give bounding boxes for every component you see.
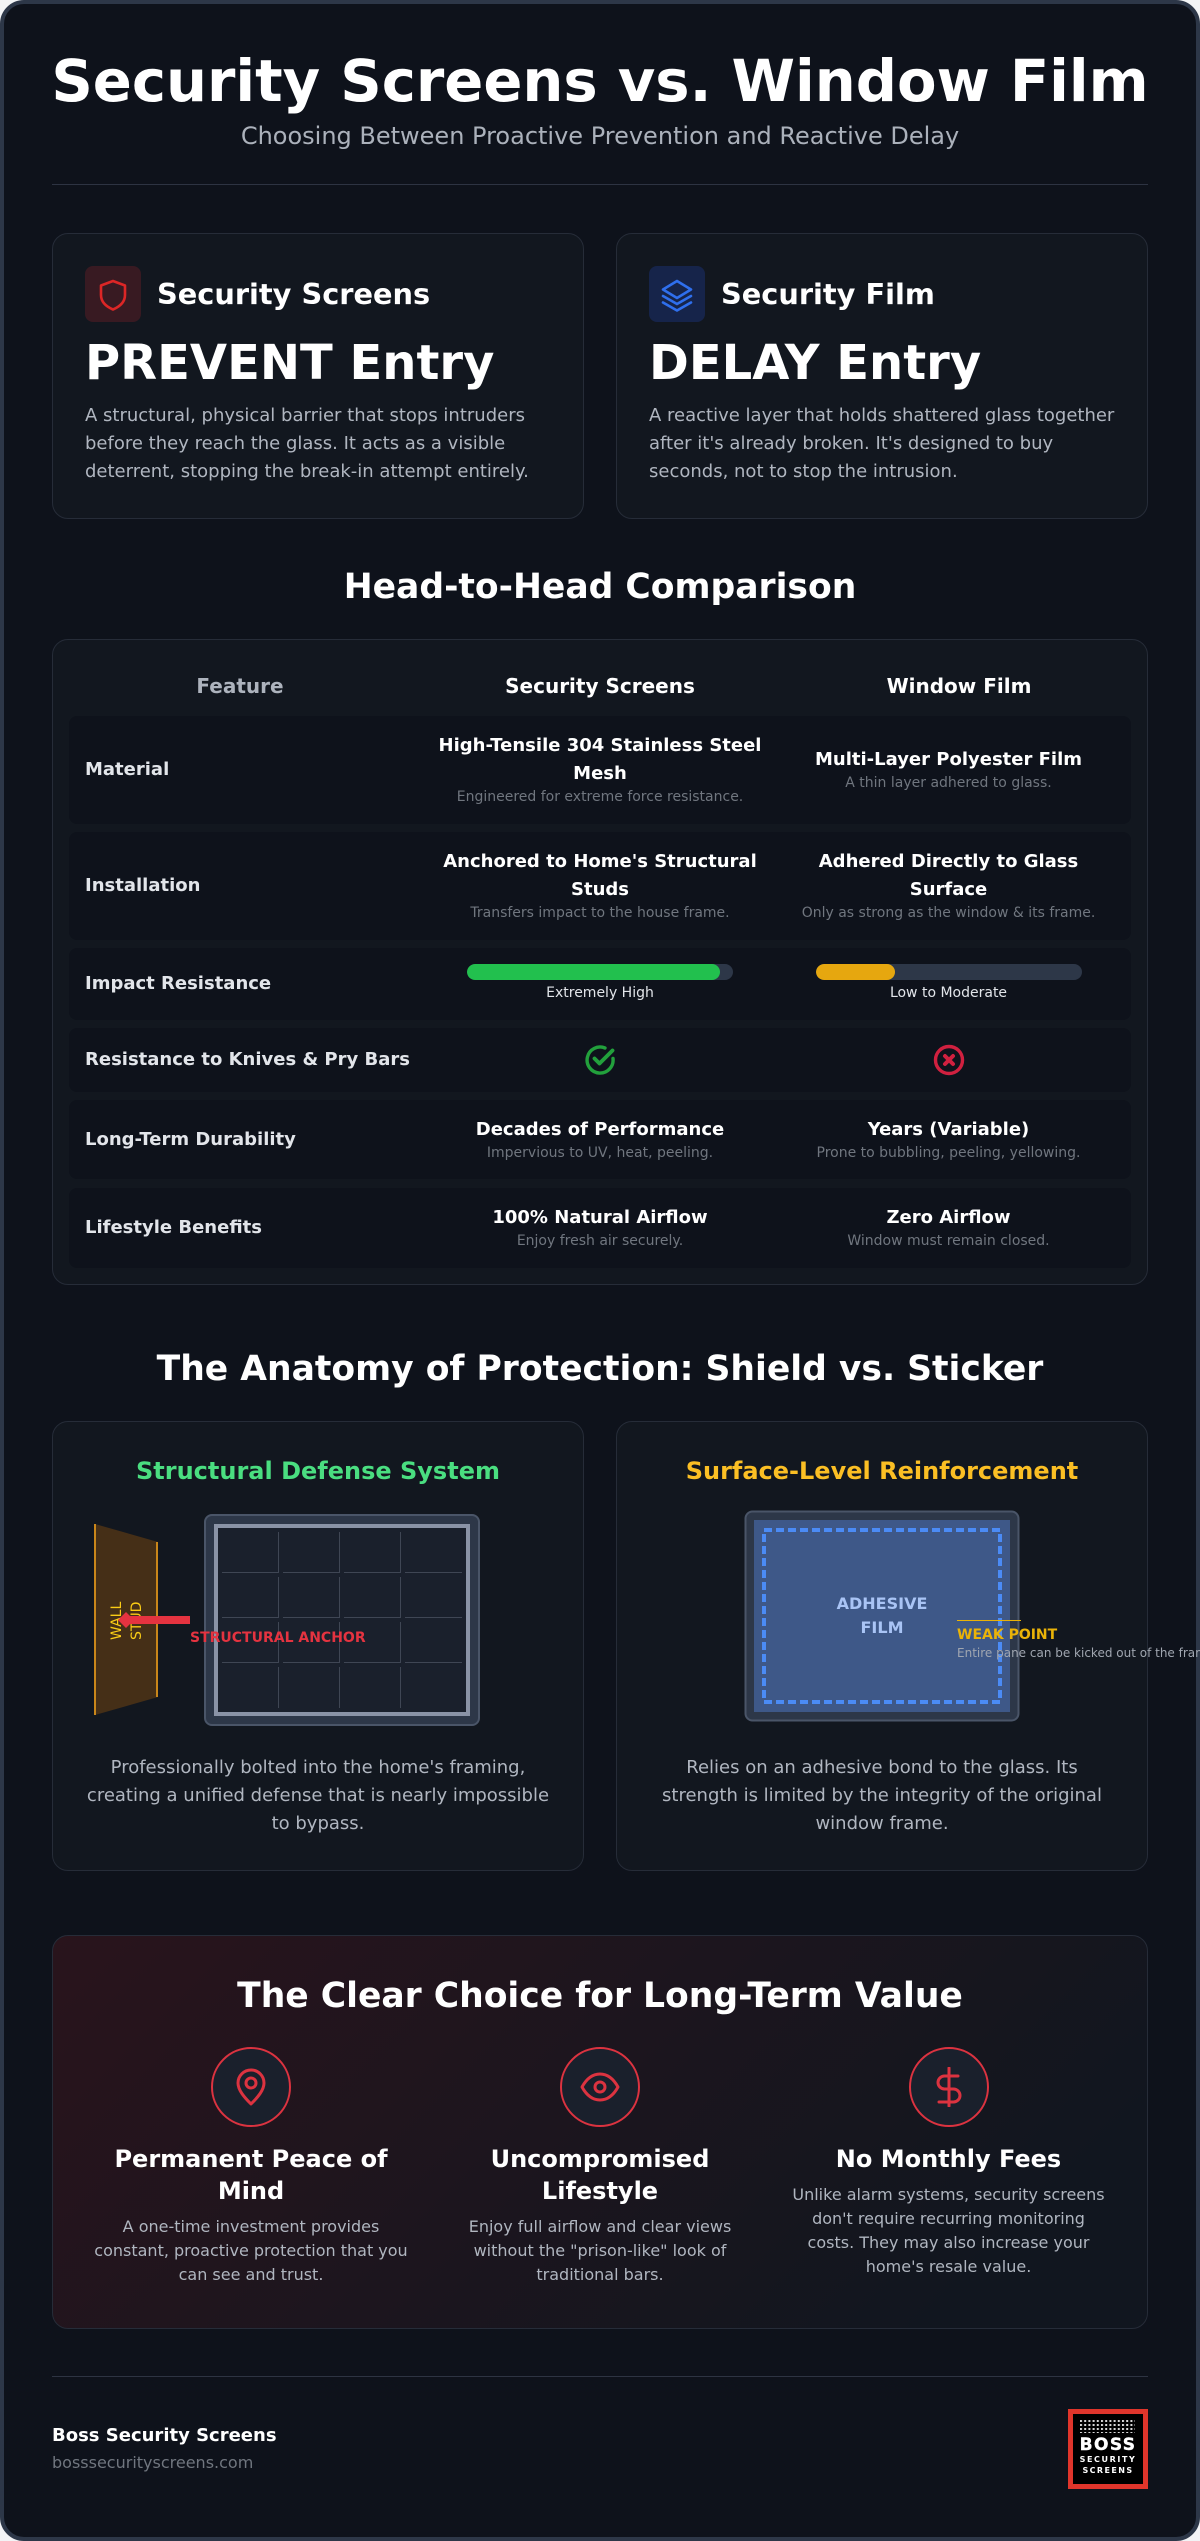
benefit description [469, 2217, 731, 2284]
description: deterrent, stopping the break-in attempt entirely. [85, 461, 529, 482]
row: long-term durability: Impervious to UV, heat, peeling. [487, 1145, 713, 1161]
row: impact resistance: Extremely High [546, 985, 654, 1001]
panel: surface-level [616, 1421, 1148, 1871]
heading: security screens: Security Screens [157, 277, 430, 311]
row: lifestyle benefits: Window must remain closed. [847, 1233, 1050, 1249]
row: installation: Studs [571, 879, 629, 900]
row: material: Material [85, 759, 169, 780]
description: structural defense: creating a unified defense that is nearly impossible [87, 1785, 549, 1806]
row: material: Mesh [573, 763, 627, 784]
description: before they reach the glass. It acts as a visible [85, 433, 505, 454]
label: adhesive film: FILM [860, 1618, 904, 1637]
icon: shield [85, 266, 141, 322]
row: installation [85, 851, 1095, 921]
footer brand name: Boss Security Screens [52, 2425, 277, 2446]
benefit description: can see and trust. [179, 2265, 323, 2284]
description: surface-level: strength is limited by the integrity of the original [662, 1785, 1102, 1806]
column: window film: Window Film [887, 674, 1031, 698]
row: long-term durability [85, 1119, 1080, 1161]
benefit heading [114, 2145, 388, 2205]
row: long-term durability: Decades of Performance [476, 1119, 724, 1140]
label: adhesive film: ADHESIVE [837, 1594, 927, 1613]
headline: prevent entry: PREVENT Entry [85, 335, 494, 391]
benefit description [792, 2185, 1105, 2276]
description: A structural, physical barrier that stops intruders [85, 405, 525, 426]
row: lifestyle benefits [85, 1207, 1050, 1249]
benefit description: home's resale value. [866, 2257, 1031, 2276]
icon: location pin [211, 2047, 291, 2127]
table header [196, 674, 1031, 698]
benefit heading: Mind [218, 2177, 284, 2205]
benefit description: Unlike alarm systems, security screens [792, 2185, 1105, 2204]
security screen frame [205, 1515, 479, 1725]
benefit description: Enjoy full airflow and clear views [469, 2217, 731, 2236]
wall stud: WALL [109, 1602, 125, 1640]
panel: comparison table [52, 639, 1148, 1285]
heading: head-to-head comparison: Head-to-Head Comparison [344, 567, 856, 607]
row: installation: Anchored to Home's Structural [443, 851, 757, 872]
label: structural anchor: STRUCTURAL ANCHOR [190, 1630, 366, 1646]
wall stud [95, 1524, 158, 1715]
icon: check [585, 1045, 615, 1075]
benefit heading: Uncompromised [491, 2145, 709, 2173]
description: A reactive layer that holds shattered glass together [649, 405, 1114, 426]
row: installation: Installation [85, 875, 200, 896]
description: structural defense: Professionally bolted into the home's framing, [111, 1757, 525, 1778]
description [649, 405, 1114, 482]
description: surface-level: window frame. [815, 1813, 949, 1834]
bar: screens extremely high [467, 964, 733, 980]
logo: boss security screens [1068, 2409, 1148, 2489]
benefit description: constant, proactive protection that you [94, 2241, 408, 2260]
benefit description: without the "prison-like" look of [474, 2241, 726, 2260]
title: Security Screens vs. Window Film [51, 48, 1149, 115]
benefit: uncompromised lifestyle [560, 2047, 640, 2127]
benefit heading: No Monthly Fees [836, 2145, 1061, 2173]
benefit: permanent peace of mind [211, 2047, 291, 2127]
row: material [85, 735, 1082, 805]
panel: security film summary [616, 233, 1148, 519]
description: structural defense [87, 1757, 549, 1834]
row: installation: Only as strong as the window & its frame. [802, 905, 1095, 921]
film [754, 1520, 1010, 1712]
row: material: High-Tensile 304 Stainless Steel [439, 735, 761, 756]
description: after it's already broken. It's designed to buy [649, 433, 1053, 454]
row: material: A thin layer adhered to glass. [845, 775, 1052, 791]
benefit: no monthly fees [909, 2047, 989, 2127]
logo: boss security screens: SCREENS [1082, 2466, 1133, 2475]
benefit heading: Lifestyle [542, 2177, 658, 2205]
dashed adhesive edge [764, 1530, 1000, 1702]
row: long-term durability: Long-Term Durability [85, 1129, 296, 1150]
icon: cross [934, 1044, 964, 1076]
row: impact resistance [85, 964, 1082, 1001]
panel heading: surface-level reinforcement: Surface-Level Reinforcement [686, 1457, 1078, 1485]
panel: security screens summary [52, 233, 584, 519]
description: seconds, not to stop the intrusion. [649, 461, 958, 482]
row: lifestyle benefits: Lifestyle Benefits [85, 1217, 262, 1238]
benefit description: A one-time investment provides [123, 2217, 379, 2236]
callout: weak point [957, 1620, 1200, 1660]
headline: delay entry: DELAY Entry [649, 335, 981, 391]
column: security screens: Security Screens [505, 674, 695, 698]
row: lifestyle benefits: Enjoy fresh air securely. [517, 1233, 683, 1249]
panel heading: structural defense system: Structural Defense System [136, 1457, 500, 1485]
row: material: Engineered for extreme force resistance. [457, 789, 743, 805]
benefit description: traditional bars. [536, 2265, 664, 2284]
benefit heading [491, 2145, 709, 2205]
column: feature: Feature [196, 674, 284, 698]
bar: film low to moderate [816, 964, 1082, 980]
diagram: screen anchored to wall stud [94, 1514, 480, 1726]
row: material: Multi-Layer Polyester Film [815, 749, 1082, 770]
benefit description: don't require recurring monitoring [812, 2209, 1085, 2228]
footer url: bosssecurityscreens.com [52, 2453, 253, 2472]
description [85, 405, 529, 482]
row: resistance to knives and pry bars: Resistance to Knives & Pry Bars [85, 1049, 410, 1070]
row: installation: Transfers impact to the house frame. [470, 905, 730, 921]
heading: clear choice: The Clear Choice for Long-Term Value [237, 1976, 963, 2016]
description: surface-level: Relies on an adhesive bond to the glass. Its [686, 1757, 1078, 1778]
subtitle: Choosing Between Proactive Prevention and Reactive Delay [241, 122, 959, 150]
logo: boss security screens: SECURITY [1080, 2455, 1136, 2464]
row: resistance to knives and pry bars [85, 1044, 964, 1076]
benefit heading: Permanent Peace of [114, 2145, 388, 2173]
logo: boss security screens: BOSS [1080, 2435, 1136, 2455]
row: lifestyle benefits: Zero Airflow [886, 1207, 1011, 1228]
icon: eye [560, 2047, 640, 2127]
window frame [746, 1512, 1018, 1720]
wall stud: STUD [129, 1602, 145, 1640]
benefit description [94, 2217, 408, 2284]
row: impact resistance: Impact Resistance [85, 973, 271, 994]
label: adhesive film [837, 1594, 927, 1637]
description: structural defense: to bypass. [272, 1813, 364, 1834]
row: long-term durability: Prone to bubbling, peeling, yellowing. [816, 1145, 1080, 1161]
heading: security film: Security Film [721, 277, 935, 311]
row: installation: Adhered Directly to Glass [819, 851, 1078, 872]
heading: anatomy of protection: The Anatomy of Protection: Shield vs. Sticker [157, 1349, 1043, 1389]
callout: weak point: WEAK POINT [957, 1627, 1058, 1643]
icon: dollar [908, 2047, 988, 2127]
row: lifestyle benefits: 100% Natural Airflow [492, 1207, 708, 1228]
benefit description: costs. They may also increase your [808, 2233, 1089, 2252]
row: installation: Surface [910, 879, 987, 900]
row: impact resistance: Low to Moderate [890, 985, 1007, 1001]
panel: structural defense [52, 1421, 584, 1871]
panel: long-term value [52, 1935, 1148, 2329]
row: long-term durability: Years (Variable) [868, 1119, 1029, 1140]
diagram: adhesive film on glass [744, 1510, 1200, 1722]
arrow: structural anchor [118, 1612, 190, 1628]
icon: layers [649, 266, 705, 322]
description: surface-level [662, 1757, 1102, 1834]
